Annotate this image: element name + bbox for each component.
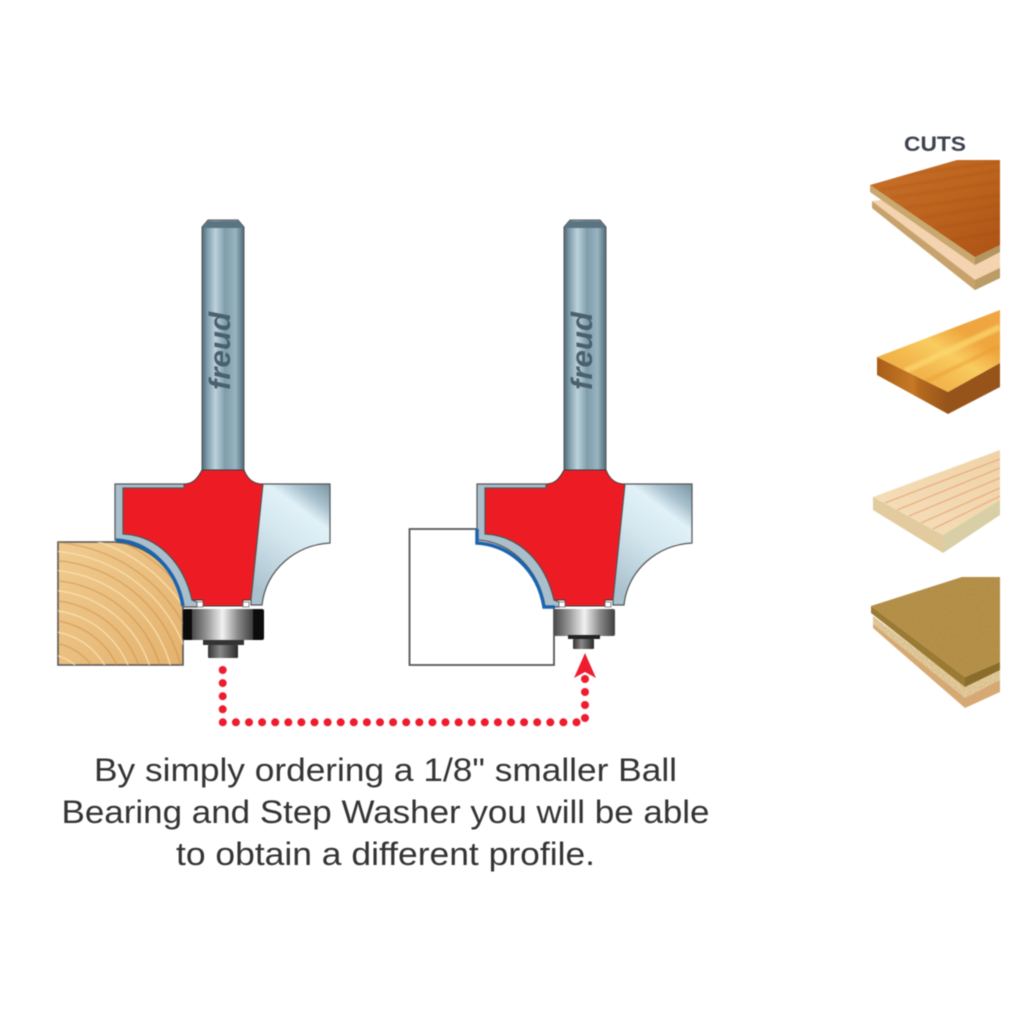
right carbide cutter (613, 484, 692, 605)
freud logo: freud (566, 311, 599, 390)
ball bearing (192, 609, 253, 640)
right bit red body (485, 470, 625, 606)
left carbide cutter (115, 484, 197, 607)
dotted red arrow (223, 653, 596, 722)
right bit shank (564, 220, 606, 472)
square workpiece (410, 529, 554, 665)
freud logo: freud (204, 311, 237, 390)
shank chamfer (203, 221, 243, 228)
arrow head (574, 653, 596, 678)
shim rings (197, 602, 249, 607)
bolt (203, 640, 244, 658)
step washer (183, 609, 264, 640)
sample: solid hardwood (877, 310, 1000, 414)
heading: cuts: CUTS (904, 133, 966, 156)
sample: softwood pine (873, 450, 1000, 553)
wood block (56, 540, 185, 666)
sample: particle board (871, 577, 1000, 708)
right carbide cutter (251, 484, 330, 605)
left carbide cutter (477, 484, 559, 607)
caption: Bearing and Step Washer you will be able (62, 794, 710, 830)
left bit red body (123, 470, 263, 606)
caption: to obtain a different profile. (176, 836, 595, 872)
smaller ball bearing (554, 609, 615, 636)
blue profile line (477, 529, 555, 607)
caption: By simply ordering a 1/8" smaller Ball (94, 752, 677, 788)
router bit with wood workpiece (0, 220, 330, 876)
left bit shank (202, 220, 244, 472)
shim rings (559, 602, 611, 607)
shank chamfer (565, 221, 605, 228)
caption (62, 752, 710, 872)
bolt (568, 635, 600, 649)
sample: veneered plywood (870, 160, 1000, 290)
router bit with square workpiece (410, 220, 692, 665)
blue profile line (116, 540, 183, 606)
